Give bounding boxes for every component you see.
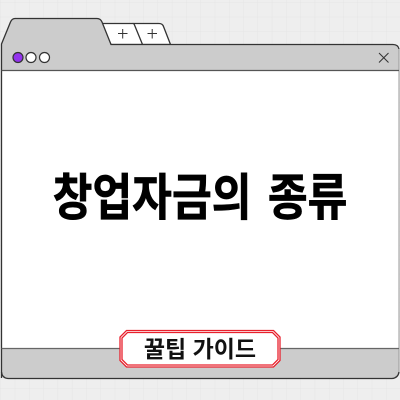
window content area [2,70,399,348]
badge inner frame [122,332,278,365]
browser tabs [100,24,170,44]
icon: close [379,53,388,62]
dot: purple [13,52,23,62]
badge outer frame [120,330,280,367]
dot: white one [26,52,36,62]
badge text: 꿀팁 가이드 [144,336,256,362]
dot: white two [40,52,50,62]
tab: first [100,24,142,44]
tab: second [133,24,170,44]
title: 창업자금의 종류 [53,170,347,226]
icon: plus first [118,29,128,38]
window control dots [13,52,50,62]
icon: plus second [148,29,157,38]
badge: guide label [120,330,280,367]
